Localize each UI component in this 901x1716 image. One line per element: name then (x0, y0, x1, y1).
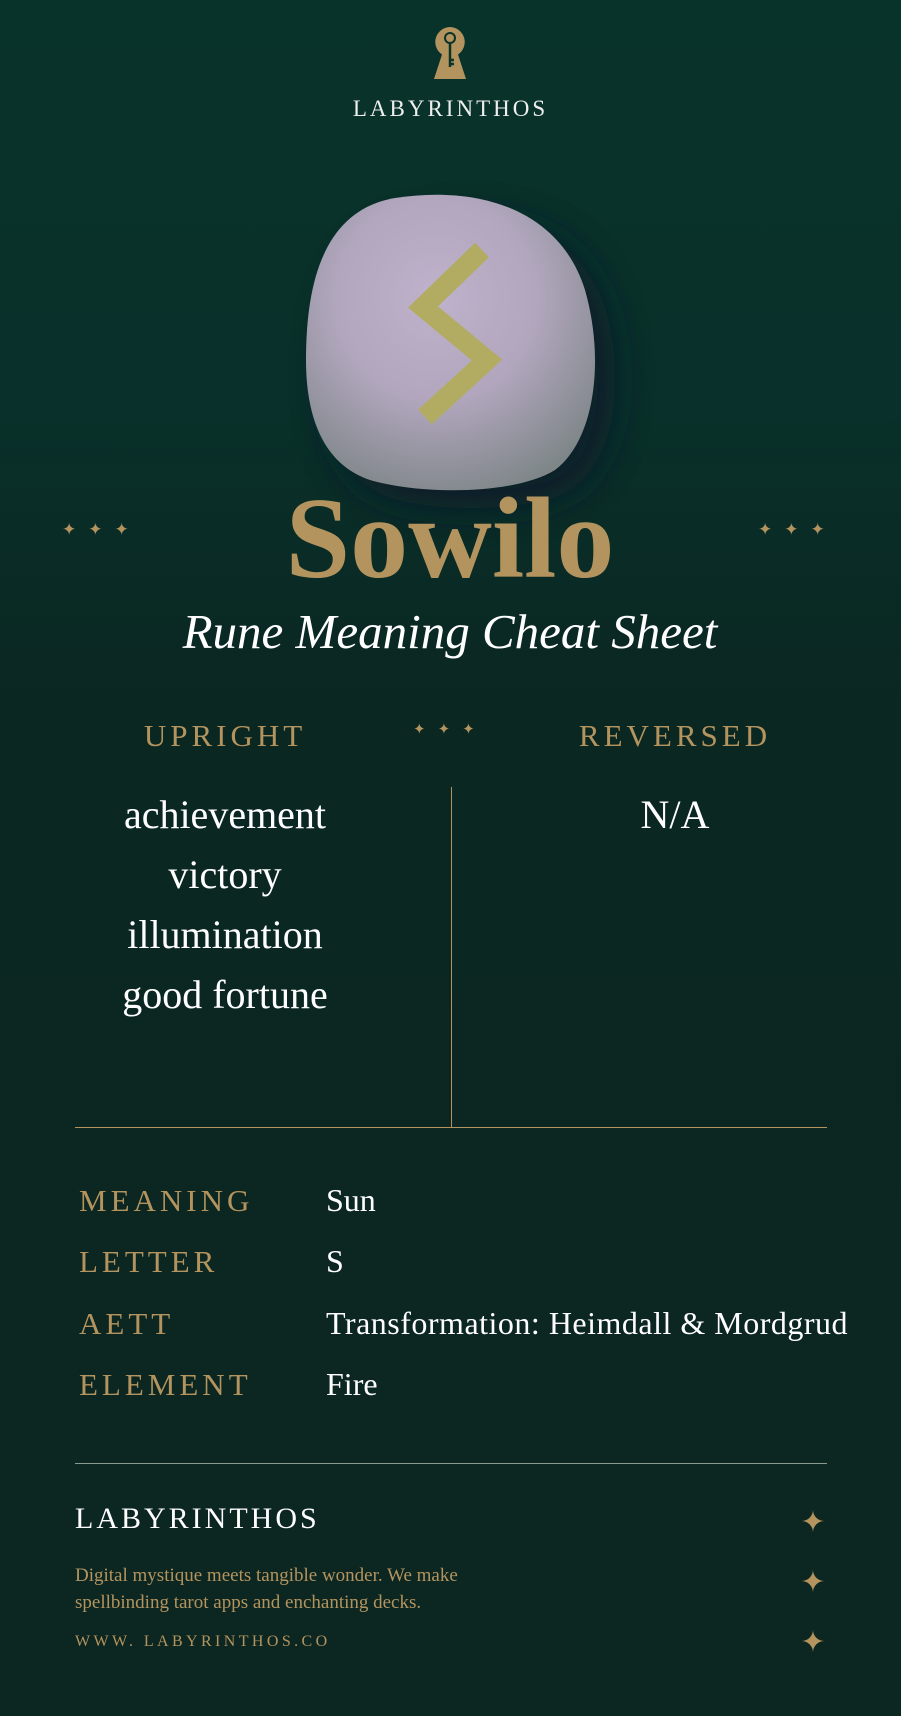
rune symbol (423, 250, 487, 417)
footer stars: ✦ (800, 1626, 826, 1659)
footer description: spellbinding tarot apps and enchanting decks. (75, 1592, 421, 1613)
row element (79, 1366, 378, 1402)
row meaning: MEANING (79, 1183, 253, 1218)
footer logo text: LABYRINTHOS (75, 1502, 320, 1535)
row meaning: Sun (326, 1182, 376, 1218)
row element: ELEMENT (79, 1367, 252, 1402)
footer description (75, 1565, 458, 1613)
rune stone (306, 194, 619, 511)
logo keyhole icon (434, 27, 466, 79)
row aett (79, 1305, 848, 1341)
title: Sowilo (286, 475, 614, 603)
row meaning (79, 1182, 376, 1218)
row letter: LETTER (79, 1244, 218, 1279)
footer stars (800, 1506, 826, 1659)
row letter (79, 1243, 344, 1279)
logo text: LABYRINTHOS (353, 96, 548, 121)
subtitle: Rune Meaning Cheat Sheet (183, 604, 717, 659)
upright keywords: achievement (124, 792, 326, 837)
stars left: ✦✦✦ (62, 520, 141, 539)
info table (79, 1182, 848, 1402)
vertical divider (451, 787, 452, 1127)
reversed heading: REVERSED (579, 718, 771, 753)
row element: Fire (326, 1366, 378, 1402)
footer url: WWW. LABYRINTHOS.CO (75, 1633, 331, 1650)
footer description: Digital mystique meets tangible wonder. We make (75, 1565, 458, 1586)
reversed keywords: N/A (641, 792, 709, 837)
upright heading: UPRIGHT (144, 718, 306, 753)
stars middle: ✦✦✦ (413, 722, 487, 738)
upright keywords: illumination (127, 912, 323, 957)
row aett: Transformation: Heimdall & Mordgrud (326, 1305, 848, 1341)
upright keywords: good fortune (122, 972, 328, 1017)
footer stars: ✦ (800, 1566, 826, 1599)
footer stars: ✦ (800, 1506, 826, 1539)
row letter: S (326, 1243, 344, 1279)
row aett: AETT (79, 1306, 174, 1341)
upright keywords (122, 792, 328, 1017)
stars right: ✦✦✦ (758, 520, 837, 539)
upright keywords: victory (168, 852, 282, 897)
